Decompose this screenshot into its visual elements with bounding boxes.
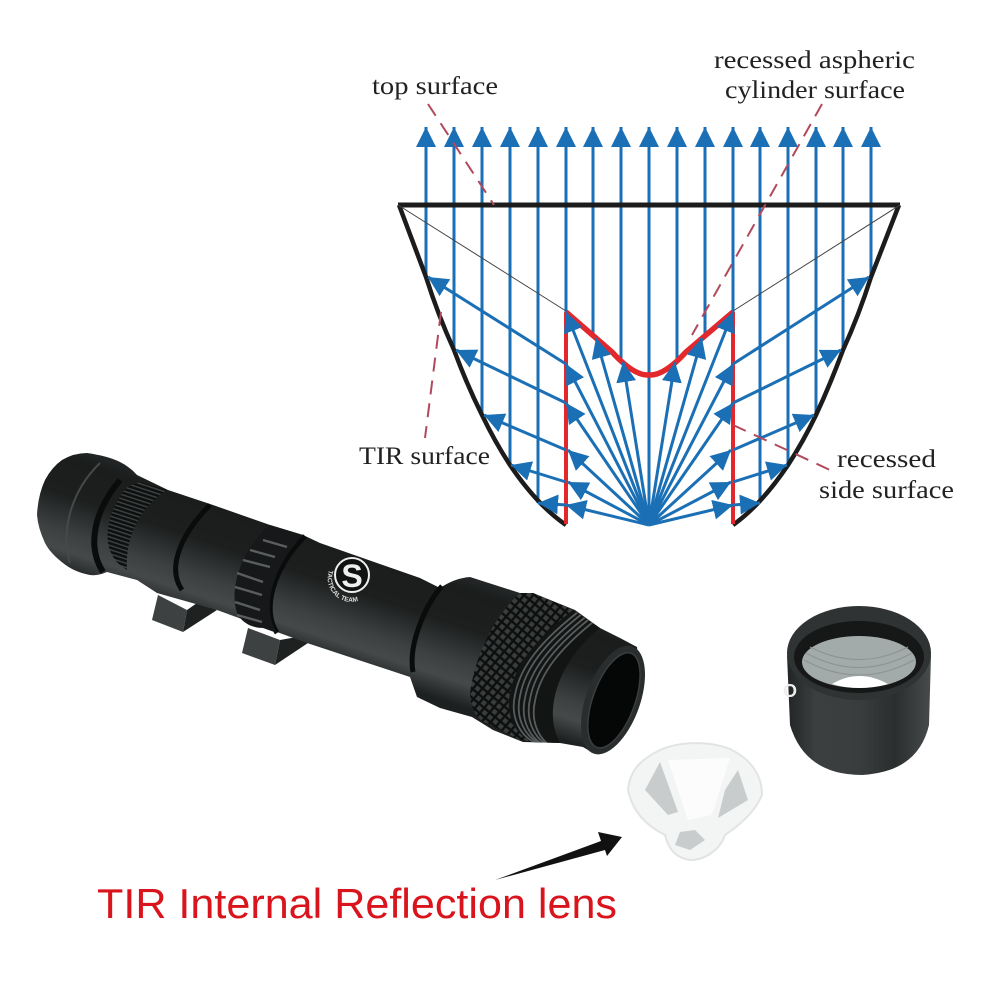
engraved letter: O xyxy=(783,681,797,701)
mount feet xyxy=(152,595,308,665)
label: recessed aspheric cylinder surface xyxy=(714,47,915,104)
refracted rays to TIR surface xyxy=(428,277,869,505)
optical diagram xyxy=(359,47,954,525)
cap and shoulder edges xyxy=(67,463,442,672)
vertical output rays xyxy=(426,127,871,525)
knurled collar xyxy=(470,593,573,742)
TIR lens xyxy=(628,743,762,860)
threads xyxy=(509,610,600,743)
bezel rim inner shadow xyxy=(794,621,924,693)
threaded glass interior xyxy=(802,636,916,688)
rays from source to side walls xyxy=(566,364,733,525)
thread ridges xyxy=(514,612,598,750)
thread lines xyxy=(804,647,914,675)
dashed leader lines xyxy=(425,104,830,470)
logo badge: TACTICAL TEAM xyxy=(328,571,358,602)
label: recessed side surface xyxy=(819,446,954,504)
grooved ring xyxy=(235,525,303,633)
ring ridges xyxy=(235,540,287,622)
pointer arrow xyxy=(495,832,622,880)
bezel rim xyxy=(787,606,931,700)
label: recessed aspheric cylinder surface: cylinder surface xyxy=(725,77,905,104)
label: recessed side surface: recessed xyxy=(837,446,937,473)
label: TIR surface: TIR surface xyxy=(359,443,490,470)
label: top surface: top surface xyxy=(372,73,498,100)
logo badge: S xyxy=(341,558,363,594)
flashlight xyxy=(37,453,645,754)
lens outline xyxy=(398,205,900,525)
rays from source to top recess xyxy=(566,312,733,525)
open mouth xyxy=(568,637,658,763)
detached bezel ring xyxy=(783,606,931,775)
flashlight body silhouette xyxy=(37,453,640,753)
lens highlight xyxy=(668,758,730,820)
caption: TIR Internal Reflection lens xyxy=(97,880,617,927)
lens cone xyxy=(628,743,762,860)
white crescent xyxy=(832,676,888,688)
lens inner facets xyxy=(645,762,748,850)
ribbed knurl ring xyxy=(107,482,167,570)
logo badge xyxy=(328,557,370,602)
label: recessed side surface: side surface xyxy=(819,477,954,504)
recessed surfaces in red xyxy=(566,312,733,524)
label: recessed aspheric cylinder surface: recessed aspheric xyxy=(714,47,915,74)
bezel body xyxy=(787,655,931,775)
